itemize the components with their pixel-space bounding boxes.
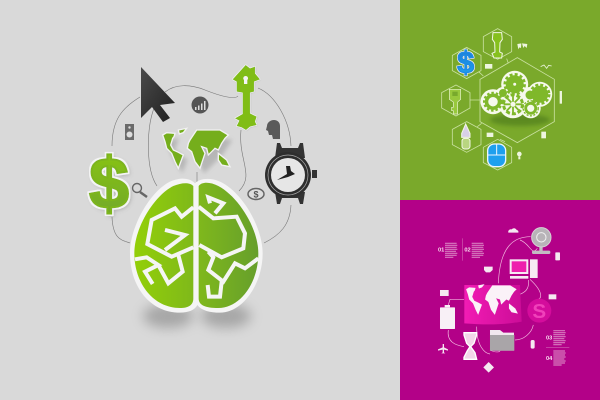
text block 02: [462, 238, 484, 261]
icon: folder: [490, 330, 514, 351]
panel: green gears infographic: [442, 29, 562, 170]
panel: magenta network infographic: [438, 228, 569, 373]
icon: outlined key: [492, 33, 502, 58]
icon: cursor arrow: [141, 67, 175, 122]
icon: magnifier: [132, 184, 147, 197]
icon: hourglass: [464, 333, 477, 359]
icon: blue mouse: [488, 144, 506, 167]
icon: house key: [233, 65, 260, 130]
panel: magenta background: [400, 200, 600, 400]
icon: speaker: [125, 124, 134, 140]
text block 01: [438, 243, 457, 257]
connector lines: [112, 86, 291, 243]
text block 03: 03: [546, 335, 552, 341]
panel: brain infographic: [89, 65, 317, 328]
small icons: [485, 43, 562, 159]
icon: world map: [163, 128, 232, 173]
icon: pen nib: [462, 124, 470, 149]
text block 02: 02: [464, 247, 471, 253]
icon: webcam: [532, 228, 551, 254]
icon: dollar coin: S: [532, 300, 546, 323]
text block 04: [546, 351, 566, 365]
icon: dollar sign: $: [89, 144, 129, 224]
hexagon frames: [442, 29, 554, 170]
icon: zigzag line: [541, 65, 552, 68]
gear faces: [499, 75, 548, 103]
icon: gears cloud: [480, 71, 552, 126]
icon: map card: [464, 284, 522, 324]
white world map: [466, 284, 518, 315]
text block 04: 04: [546, 356, 553, 362]
icon: bar chart badge: [192, 96, 208, 114]
icon: coin with dollar: $: [253, 190, 259, 200]
icon: brain: [130, 179, 263, 313]
gear backing: [480, 71, 552, 118]
text block 01: 01: [438, 247, 444, 253]
panel: green background: [400, 0, 600, 200]
icon: tablet battery: [440, 305, 455, 329]
icon: desktop computer: [510, 259, 538, 279]
icon: wrist watch: [265, 143, 317, 204]
icon: head silhouette: [266, 120, 280, 139]
brain shadow: [143, 304, 251, 328]
icon: square key: [449, 89, 461, 114]
icon: coin with dollar: [248, 188, 264, 200]
icon: blue dollar: $: [457, 46, 474, 80]
connector lines: [448, 237, 541, 354]
text block 03: [546, 331, 569, 347]
small icons: [438, 228, 560, 373]
panel: grey background: [0, 0, 400, 400]
icon: dollar coin: [527, 299, 551, 323]
